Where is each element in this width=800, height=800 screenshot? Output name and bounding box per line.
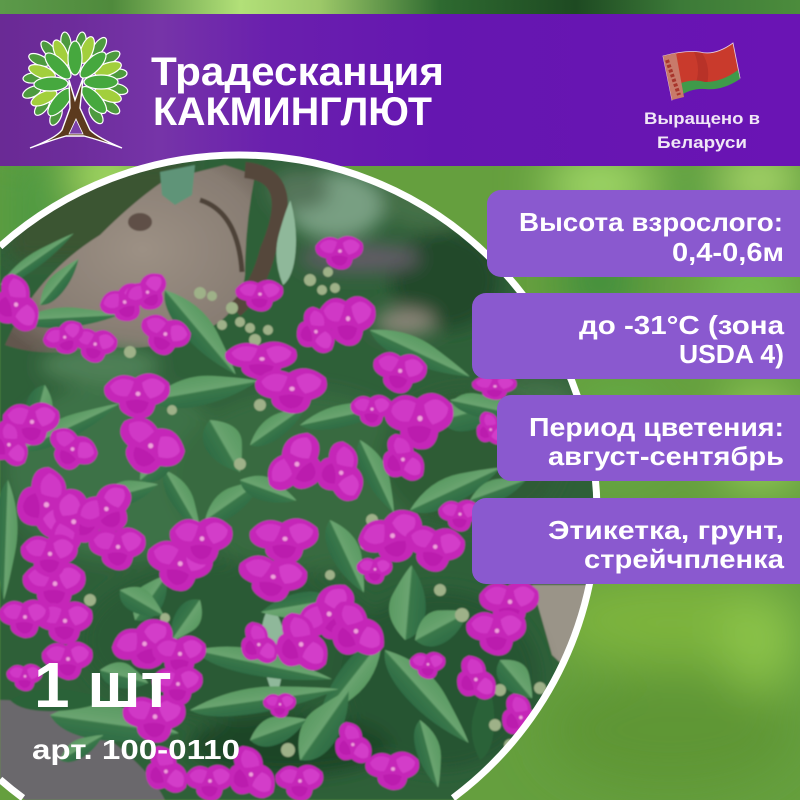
flag caption bbox=[644, 109, 760, 152]
lower rocks bbox=[0, 700, 165, 800]
inner green leaves bbox=[34, 41, 118, 120]
top strip bbox=[0, 0, 800, 15]
panel: package bbox=[472, 498, 800, 584]
flag caption: Выращено в bbox=[644, 109, 760, 128]
buds bbox=[84, 267, 546, 757]
panel: blooming period: Период цветения: bbox=[529, 412, 784, 442]
flowers bbox=[0, 272, 40, 332]
rock bbox=[5, 165, 255, 352]
outer leaves bbox=[21, 31, 129, 127]
mid yellow-green leaves bbox=[27, 35, 123, 109]
panel: hardiness: до -31°С (зона bbox=[579, 310, 785, 340]
article number: арт. 100-0110 bbox=[32, 734, 240, 765]
logo: tree bbox=[21, 31, 129, 148]
title: КАКМИНГЛЮТ bbox=[153, 90, 432, 134]
panel: height: 0,4-0,6м bbox=[672, 237, 784, 267]
header band bbox=[0, 14, 800, 166]
panel: hardiness: USDA 4) bbox=[679, 339, 784, 369]
panel: blooming period: август-сентябрь bbox=[548, 441, 784, 471]
panel: blooming period bbox=[497, 395, 800, 481]
photo: flowering tradescantia in a round frame bbox=[0, 150, 600, 800]
icon: flag of Belarus bbox=[663, 43, 740, 100]
quantity label: 1 шт bbox=[34, 649, 172, 721]
panel: height bbox=[487, 190, 800, 277]
flag caption: Беларуси bbox=[657, 133, 747, 152]
ivy leaf bbox=[160, 165, 195, 205]
trunk bbox=[30, 78, 122, 148]
title bbox=[151, 50, 444, 134]
foliage shadow bbox=[5, 347, 560, 775]
panel: package: Этикетка, грунт, bbox=[548, 515, 784, 545]
panel: height: Высота взрослого: bbox=[519, 207, 783, 237]
panel: package: стрейчпленка bbox=[584, 544, 785, 574]
title: Традесканция bbox=[151, 50, 444, 94]
photo frame ring bbox=[0, 155, 597, 798]
leaves bbox=[0, 233, 74, 286]
panel: hardiness bbox=[472, 293, 800, 379]
